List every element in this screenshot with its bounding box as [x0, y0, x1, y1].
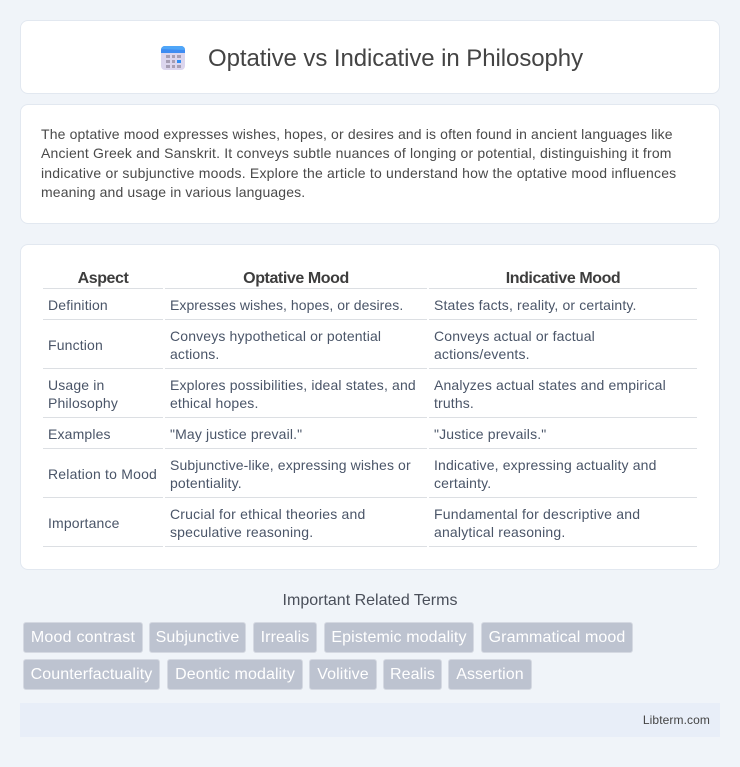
- tag: counterfactuality: Counterfactuality: [31, 666, 152, 683]
- row: examples: Examples: [48, 426, 111, 442]
- footer credit: Libterm.com: [643, 713, 710, 727]
- row: importance: Crucial for ethical theories and: [170, 506, 366, 522]
- tag: assertion: Assertion: [456, 666, 524, 683]
- row: function: actions.: [170, 346, 219, 362]
- related terms heading: Important Related Terms: [283, 592, 457, 609]
- row: relation to mood: [48, 457, 657, 491]
- row: relation to mood: potentiality.: [170, 475, 242, 491]
- row: function: actions/events.: [434, 346, 530, 362]
- tag: assertion: [448, 659, 532, 690]
- row: function: [48, 328, 595, 362]
- row: usage in philosophy: Usage in: [48, 377, 104, 393]
- row: usage in philosophy: Analyzes actual states and empirical: [434, 377, 666, 393]
- title: Optative vs Indicative in Philosophy: [208, 45, 583, 72]
- row: relation to mood: Indicative, expressing actuality and: [434, 457, 657, 473]
- icon: calendar: [161, 46, 185, 70]
- tag: counterfactuality: [23, 659, 160, 690]
- intro text: indicative or subjunctive moods. Explore the article to understand how the optative mood influences: [41, 165, 676, 181]
- row: importance: analytical reasoning.: [434, 524, 565, 540]
- row: function: Conveys actual or factual: [434, 328, 595, 344]
- intro text: Ancient Greek and Sanskrit. It conveys subtle nuances of longing or potential, distinguishing it from: [41, 145, 672, 161]
- row: function: Conveys hypothetical or potential: [170, 328, 381, 344]
- row: usage in philosophy: truths.: [434, 395, 474, 411]
- table panel: [20, 244, 720, 570]
- tag: subjunctive: Subjunctive: [156, 629, 239, 646]
- row: examples: "Justice prevails.": [434, 426, 546, 442]
- row: definition: States facts, reality, or certainty.: [434, 297, 637, 313]
- row: examples: [48, 426, 546, 442]
- tag: epistemic modality: [324, 622, 474, 653]
- row: usage in philosophy: Philosophy: [48, 395, 118, 411]
- tag: grammatical mood: Grammatical mood: [489, 629, 625, 646]
- tag: irrealis: [253, 622, 317, 653]
- footer bar: [20, 703, 720, 737]
- row: function: Function: [48, 337, 103, 353]
- row: usage in philosophy: [48, 377, 666, 411]
- tag: grammatical mood: [481, 622, 633, 653]
- table header row: Optative Mood: [243, 270, 349, 287]
- related terms tags: [23, 622, 633, 690]
- row: definition: Expresses wishes, hopes, or desires.: [170, 297, 403, 313]
- header panel: [20, 20, 720, 94]
- table header row: Aspect: [78, 270, 128, 287]
- tag: mood contrast: Mood contrast: [31, 629, 135, 646]
- row: examples: "May justice prevail.": [170, 426, 302, 442]
- tag: realis: [383, 659, 442, 690]
- row: importance: [48, 506, 640, 540]
- intro text: The optative mood expresses wishes, hopes, or desires and is often found in ancient languages like: [41, 126, 673, 142]
- row: importance: speculative reasoning.: [170, 524, 313, 540]
- row: usage in philosophy: Explores possibilities, ideal states, and: [170, 377, 416, 393]
- row: definition: Definition: [48, 297, 108, 313]
- tag: mood contrast: [23, 622, 143, 653]
- row: importance: Importance: [48, 515, 120, 531]
- tag: volitive: Volitive: [317, 666, 369, 683]
- tag: realis: Realis: [390, 666, 435, 683]
- row: definition: [48, 297, 637, 313]
- intro panel: [20, 104, 720, 224]
- row: relation to mood: Relation to Mood: [48, 466, 157, 482]
- table header row: [78, 270, 620, 287]
- row: usage in philosophy: ethical hopes.: [170, 395, 258, 411]
- intro text: meaning and usage in various languages.: [41, 184, 305, 200]
- intro text: [41, 126, 676, 200]
- tag: deontic modality: Deontic modality: [175, 666, 295, 683]
- row: relation to mood: certainty.: [434, 475, 491, 491]
- table header row: Indicative Mood: [506, 270, 620, 287]
- row: relation to mood: Subjunctive-like, expressing wishes or: [170, 457, 411, 473]
- tag: epistemic modality: Epistemic modality: [331, 629, 467, 646]
- tag: subjunctive: [149, 622, 246, 653]
- row: importance: Fundamental for descriptive and: [434, 506, 640, 522]
- tag: deontic modality: [167, 659, 303, 690]
- tag: volitive: [309, 659, 377, 690]
- tag: irrealis: Irrealis: [261, 629, 309, 646]
